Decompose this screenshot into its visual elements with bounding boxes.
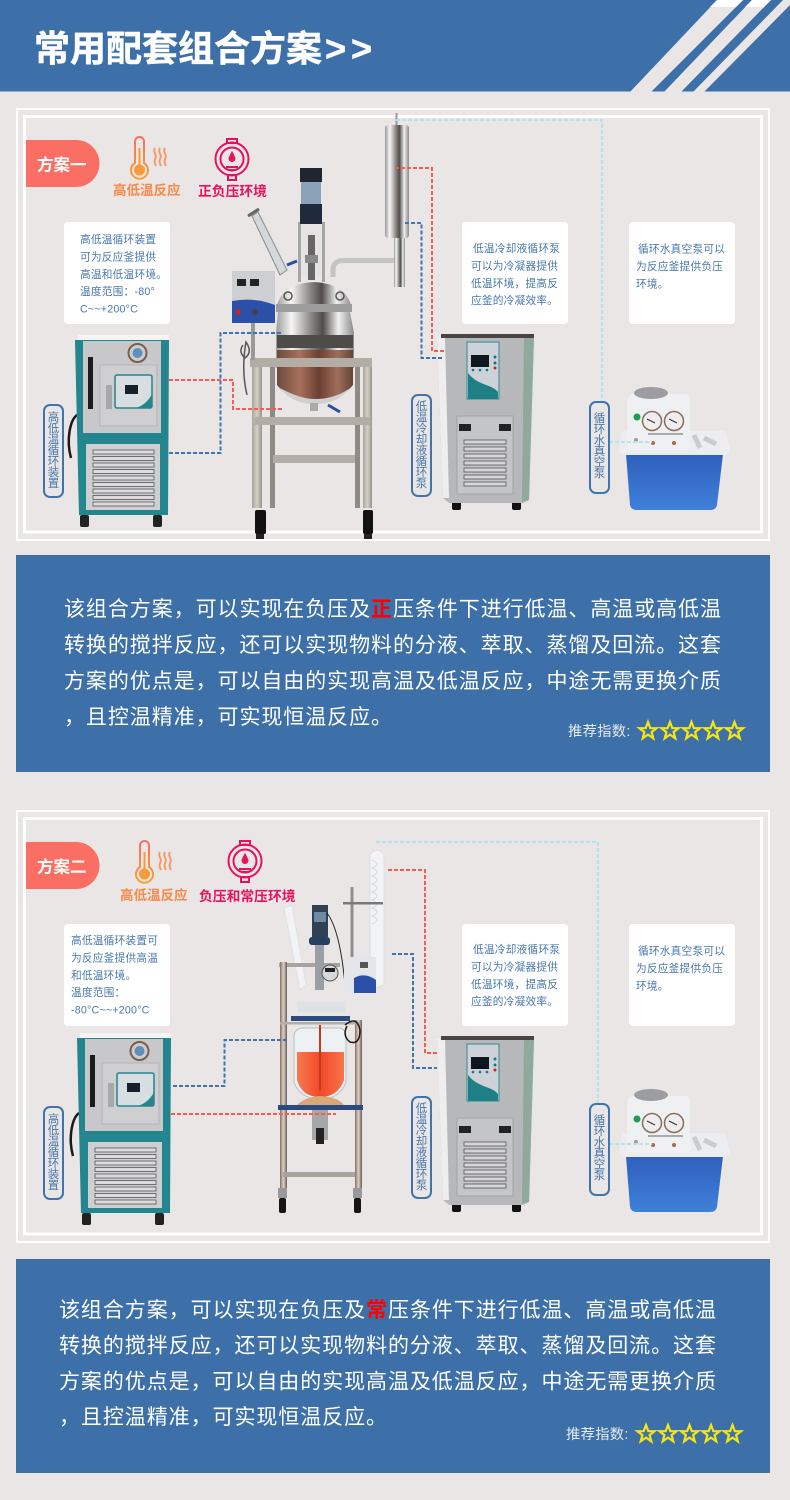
pill label: cooling pump: 温	[416, 410, 428, 424]
pill label: circulation unit: 装	[48, 1168, 60, 1181]
panel: scheme two diagram	[17, 811, 769, 1242]
pill label: vacuum pump: 泵	[594, 467, 606, 480]
pill label: circulation unit: 高	[48, 1114, 59, 1126]
card: circulation unit note: 高温和低温环境。	[80, 268, 167, 281]
card: coolant pump note	[462, 222, 568, 324]
pill label: circulation unit: 循	[48, 444, 59, 457]
rating: 推荐指数:	[566, 1426, 629, 1443]
pill label: circulation unit: 高	[48, 412, 59, 424]
pill label: circulation unit: 温	[48, 1134, 60, 1148]
pill label: vacuum pump: 水	[594, 434, 606, 447]
card: coolant pump note: 低温环境，提高反	[471, 277, 558, 290]
pill label: circulation unit: 环	[48, 456, 59, 468]
device: teal circulation chiller	[71, 1033, 171, 1225]
card: coolant pump note: 可以为冷凝器提供	[471, 960, 558, 973]
card: circulation unit note	[64, 222, 170, 324]
rating	[566, 1425, 741, 1443]
pill label: vacuum pump: 真	[594, 444, 605, 458]
device: glass reactor	[278, 850, 384, 1213]
pill label: circulation unit: 低	[48, 1124, 60, 1137]
pill label: cooling pump: 泵	[416, 477, 428, 490]
label: temperature reaction: 高低温反应	[113, 182, 180, 198]
panel: scheme one description	[16, 555, 770, 772]
pill label: cooling pump: 低	[416, 1103, 427, 1115]
card: circulation unit note: -80°C~~+200°C	[71, 1005, 150, 1017]
card: circulation unit note: C~~+200°C	[80, 304, 138, 316]
card: vacuum pump note: 为反应釜提供负压	[636, 260, 723, 273]
card: coolant pump note: 应釜的冷凝效率。	[471, 995, 558, 1008]
badge: 方案二	[26, 842, 99, 889]
card: coolant pump note: 低温环境，提高反	[471, 978, 558, 991]
icon: pressure gauge	[228, 841, 262, 882]
pill label: cooling pump	[412, 1097, 431, 1198]
pill label: cooling pump: 泵	[416, 1179, 428, 1192]
card: circulation unit note: 高低温循环装置	[80, 234, 156, 246]
label: pressure environment: 正负压环境	[198, 183, 267, 199]
pill label: circulation unit: 温	[48, 432, 60, 446]
text block: 方案的优点是，可以自由的实现高温及低温反应，中途无需更换介质	[64, 670, 722, 693]
label: temperature reaction: 高低温反应	[120, 887, 188, 903]
card: vacuum pump note	[629, 924, 735, 1026]
connector: vacuum line	[376, 842, 652, 1144]
pill label: vacuum pump	[590, 402, 609, 493]
panel: scheme one diagram	[17, 109, 769, 540]
pill label: vacuum pump: 水	[594, 1136, 606, 1149]
card: circulation unit note: 温度范围：	[71, 986, 125, 999]
text block: 该组合方案，可以实现在负压及常压条件下进行低温、高温或高低温	[59, 1299, 717, 1322]
pill label: cooling pump: 冷	[416, 1124, 427, 1137]
pill label: circulation unit: 环	[48, 1158, 59, 1170]
pill label: vacuum pump	[590, 1104, 609, 1195]
pill label: cooling pump: 环	[416, 1169, 427, 1181]
text block: 方案的优点是，可以自由的实现高温及低温反应，中途无需更换介质	[59, 1370, 717, 1393]
pill label: cooling pump: 循	[416, 1157, 427, 1170]
pill label: cooling pump: 温	[416, 1112, 428, 1126]
badge: 方案二: 方案二	[37, 856, 86, 876]
card: circulation unit note	[64, 924, 170, 1026]
pill label: circulation unit: 置	[48, 1179, 59, 1192]
card: vacuum pump note: 循环水真空泵可以	[638, 244, 725, 256]
card: vacuum pump note: 循环水真空泵可以	[638, 946, 725, 958]
device: teal circulation chiller	[69, 335, 169, 527]
rating	[568, 722, 743, 740]
device: stainless steel reactor	[232, 113, 409, 539]
card: coolant pump note: 低温冷却液循环泵	[473, 944, 560, 956]
connector: coolant lines	[388, 870, 437, 1068]
pill label: vacuum pump: 泵	[594, 1169, 606, 1182]
pill label: circulation unit: 装	[48, 466, 60, 479]
connector: coolant lines	[395, 168, 444, 358]
card: vacuum pump note: 为反应釜提供负压	[636, 962, 723, 975]
header banner	[0, 0, 790, 92]
pill label: circulation unit	[44, 405, 63, 497]
text block: 转换的搅拌反应，还可以实现物料的分液、萃取、蒸馏及回流。这套	[64, 634, 722, 657]
pill label: circulation unit: 置	[48, 477, 59, 490]
icon: thermometer	[136, 841, 171, 883]
pill label: cooling pump: 却	[416, 433, 427, 446]
text block: ，且控温精准，可实现恒温反应。	[59, 1406, 388, 1429]
pill label: cooling pump	[412, 395, 431, 496]
card: circulation unit note: 温度范围：-80°	[80, 285, 155, 298]
card: coolant pump note: 可以为冷凝器提供	[471, 259, 558, 272]
pill label: cooling pump: 液	[416, 1145, 428, 1159]
connector: circulation lines	[171, 1040, 336, 1114]
text block: ，且控温精准，可实现恒温反应。	[64, 706, 393, 729]
device: vacuum pump	[619, 387, 730, 510]
connector: circulation lines	[169, 333, 284, 453]
card: coolant pump note: 应釜的冷凝效率。	[471, 294, 558, 307]
card: coolant pump note: 低温冷却液循环泵	[473, 243, 560, 255]
card: circulation unit note: 高低温循环装置可	[71, 935, 158, 947]
text block: 转换的搅拌反应，还可以实现物料的分液、萃取、蒸馏及回流。这套	[59, 1335, 717, 1358]
connector: vacuum line	[396, 120, 652, 442]
pill label: vacuum pump: 环	[594, 424, 605, 436]
pill label: circulation unit: 低	[48, 422, 60, 435]
pill label: vacuum pump: 空	[594, 1157, 605, 1171]
card: vacuum pump note: 环境。	[636, 277, 669, 290]
badge: 方案一: 方案一	[37, 154, 86, 174]
title: 常用配套组合方案>>	[34, 28, 372, 69]
card: circulation unit note: 为反应釜提供高温	[71, 951, 158, 964]
pill label: circulation unit: 循	[48, 1146, 59, 1159]
card: circulation unit note: 和低温环境。	[71, 969, 136, 982]
pill label: cooling pump: 液	[416, 443, 428, 457]
panel: scheme two description	[16, 1259, 770, 1473]
device: vacuum pump	[619, 1089, 730, 1212]
card: circulation unit note: 可为反应釜提供	[80, 250, 156, 263]
icon: pressure gauge	[216, 139, 248, 180]
pill label: vacuum pump: 真	[594, 1146, 605, 1160]
pill label: vacuum pump: 空	[594, 455, 605, 469]
device: cooling pump	[437, 334, 534, 510]
card: vacuum pump note: 环境。	[636, 979, 669, 992]
pill label: vacuum pump: 循	[594, 413, 605, 425]
pill label: cooling pump: 循	[416, 455, 427, 468]
device: cooling pump	[437, 1036, 534, 1212]
pill label: cooling pump: 环	[416, 467, 427, 479]
pill label: vacuum pump: 环	[594, 1126, 605, 1138]
pill label: cooling pump: 低	[416, 401, 427, 413]
pill label: vacuum pump: 循	[594, 1115, 605, 1127]
frame	[17, 109, 769, 540]
frame	[17, 811, 769, 1242]
text block: 该组合方案，可以实现在负压及正压条件下进行低温、高温或高低温	[64, 598, 722, 621]
icon: thermometer	[131, 137, 166, 179]
pill label: circulation unit	[44, 1107, 63, 1199]
label: pressure environment: 负压和常压环境	[199, 888, 296, 904]
badge: 方案一	[26, 140, 99, 187]
card: coolant pump note	[462, 924, 568, 1026]
card: vacuum pump note	[629, 222, 735, 324]
pill label: cooling pump: 却	[416, 1135, 427, 1148]
pill label: cooling pump: 冷	[416, 422, 427, 435]
rating: 推荐指数:	[568, 723, 631, 740]
